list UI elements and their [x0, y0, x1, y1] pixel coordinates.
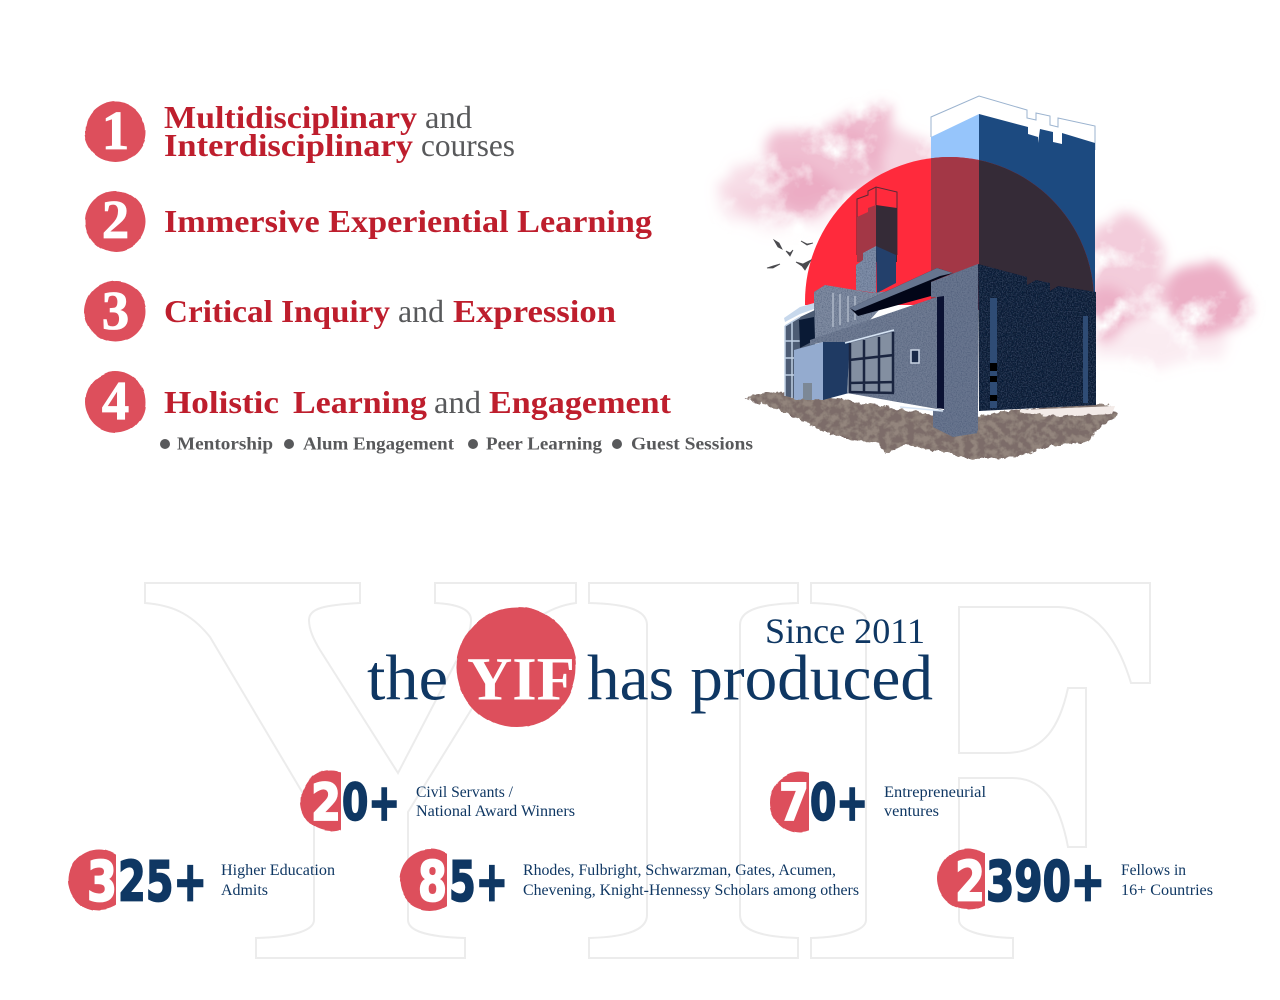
since 2011: Since 2011	[765, 611, 925, 651]
heading 1: and	[425, 99, 472, 135]
stat: 2390+: 16+ Countries	[1121, 882, 1213, 899]
window grid	[845, 330, 894, 393]
heading 1: courses	[421, 127, 515, 163]
dark face window strips	[990, 298, 1088, 408]
watermark: YIF outline letters	[145, 583, 1150, 958]
sub-list bullets: Guest Sessions	[631, 434, 753, 454]
stat: 85+: Chevening, Knight-Hennessy Scholars among others	[523, 882, 859, 899]
stat: 85+: Rhodes, Fulbright, Schwarzman, Gates, Acumen,	[523, 862, 836, 879]
number badge 1: 1	[102, 100, 129, 161]
number badge 3	[85, 280, 146, 342]
stat: 325+: 3	[87, 850, 117, 914]
heading 3: Expression	[453, 293, 616, 329]
stat: 70+: 0+	[810, 774, 868, 833]
stat: 70+: 7	[779, 774, 809, 833]
item 2: immersive experiential learning	[85, 189, 652, 252]
illustration: building with clouds and red sun	[719, 96, 1247, 460]
stat: 85+: 8	[418, 850, 447, 914]
pink cloud left	[719, 106, 936, 234]
sub-list bullets: Alum Engagement	[303, 434, 454, 454]
sub-list bullets: Mentorship	[177, 434, 273, 454]
dark pillar	[937, 296, 944, 409]
small window	[911, 350, 919, 363]
stat: 20+: Civil Servants /	[416, 784, 514, 801]
birds	[767, 240, 813, 270]
overhang roof	[850, 268, 953, 316]
light blue block	[794, 342, 850, 400]
dark main face	[978, 264, 1096, 411]
tower over sun overlap	[931, 150, 1095, 310]
stat: 85+: 5+	[449, 850, 508, 914]
item 3: critical inquiry and expression	[85, 280, 616, 342]
number badge 1	[85, 100, 146, 162]
item 1: multidisciplinary courses	[85, 99, 515, 163]
back tower block	[856, 246, 896, 293]
tower outline	[931, 96, 1095, 150]
sub-list bullets: Peer Learning	[486, 434, 602, 454]
stat: 325+: 25+	[118, 850, 207, 914]
foreground shrubs	[780, 400, 1112, 460]
stat: 325+	[68, 850, 335, 914]
stat: 325+: Higher Education	[221, 862, 335, 879]
title block	[367, 608, 933, 728]
number badge 4	[85, 370, 146, 432]
stat: 325+: Admits	[221, 882, 268, 899]
number badge 2: 2	[102, 189, 129, 250]
YIF badge	[456, 608, 576, 728]
stat: 2390+: 2	[955, 850, 985, 914]
stat: 20+	[300, 770, 575, 833]
item 4: holistic learning and engagement	[85, 370, 753, 454]
wall foot ledge	[900, 407, 943, 411]
pale ledge	[1020, 406, 1115, 417]
stat: 85+	[400, 850, 859, 914]
heading 1: Multidisciplinary	[164, 99, 417, 135]
heading 3: and	[398, 293, 444, 329]
YIF badge: YIF	[467, 646, 575, 714]
sub-list bullets	[160, 434, 753, 454]
number badge 4: 4	[102, 370, 129, 431]
has produced: has produced	[587, 642, 933, 714]
heading 4: Holistic	[164, 384, 279, 420]
small reflected tower	[857, 187, 897, 262]
stat: 70+	[770, 772, 987, 833]
glass side block	[784, 303, 815, 398]
stat: 20+: 0+	[342, 774, 400, 833]
stat: 2390+	[938, 848, 1213, 914]
middle brick wall	[810, 297, 943, 410]
pink cloud right	[1084, 212, 1247, 367]
number badge 3: 3	[102, 280, 129, 341]
heading 4: Learning	[293, 384, 427, 420]
brick corner face	[931, 264, 978, 437]
red sun	[805, 157, 1094, 305]
stat: 2390+: 390+	[986, 850, 1105, 914]
back wing	[810, 285, 897, 342]
stat: 2390+: Fellows in	[1121, 862, 1186, 879]
number badge 2	[85, 189, 146, 252]
heading 2: Immersive Experiential Learning	[164, 203, 652, 239]
heading 1: Interdisciplinary	[164, 127, 413, 163]
the: the	[367, 642, 448, 714]
stat: 70+: Entrepreneurial	[884, 784, 987, 801]
heading 4: Engagement	[489, 384, 671, 420]
heading 4: and	[434, 384, 481, 420]
heading 3: Critical Inquiry	[164, 293, 390, 329]
stat: 20+: 2	[311, 774, 341, 833]
stat: 70+: ventures	[884, 803, 939, 820]
ground and shrubs	[746, 392, 1118, 460]
stat: 20+: National Award Winners	[416, 803, 575, 820]
tower faces	[931, 114, 1095, 405]
